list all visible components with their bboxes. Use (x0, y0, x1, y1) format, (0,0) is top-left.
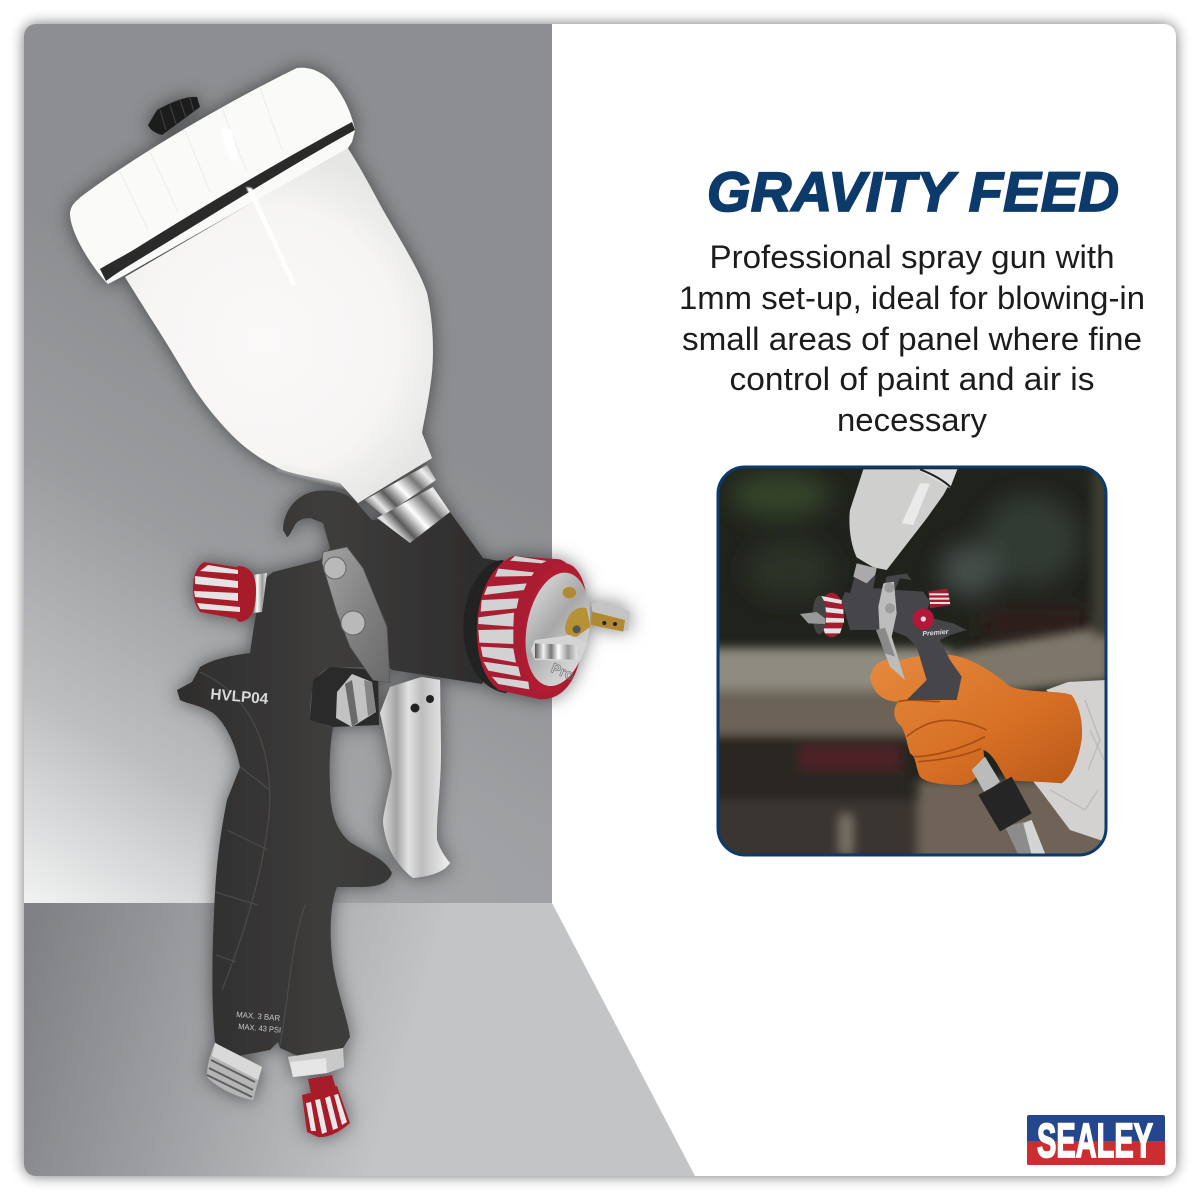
description text: small areas of panel where fine (682, 321, 1142, 357)
valve housing block (310, 667, 379, 727)
glove sleeve (1032, 680, 1106, 842)
trigger holes (410, 695, 434, 712)
description text: control of paint and air is (730, 361, 1094, 397)
miniature gun branding: Premier (922, 629, 950, 638)
chrome valve (336, 674, 376, 727)
lever rivets (324, 557, 365, 635)
soft cup shading (280, 466, 372, 490)
grip contour lines (200, 672, 305, 1045)
cup sealing band (100, 122, 355, 281)
pressure marking (236, 1010, 281, 1035)
ring flutes (478, 556, 547, 689)
sleeve creases (1050, 700, 1104, 810)
miniature cup details (902, 469, 957, 525)
miniature cup (849, 469, 957, 570)
grey wall backdrop (24, 24, 552, 904)
orange glove (870, 655, 1082, 785)
description text: 1mm set-up, ideal for blowing-in (679, 280, 1145, 316)
in-use photo (710, 467, 1118, 870)
fluid adjuster knob (288, 1048, 350, 1137)
head, nozzle ring and air cap: Pro (549, 660, 576, 683)
cup highlights (220, 128, 296, 285)
trigger (380, 677, 450, 878)
product: spray gun (70, 68, 630, 1137)
description text (679, 239, 1145, 438)
gun body and grip (177, 490, 510, 1057)
swing lever plate (322, 547, 390, 683)
paint cup lid knob (148, 97, 200, 135)
model marking HVLP04: HVLP04 (210, 686, 269, 708)
pressure marking: MAX. 3 BAR (236, 1010, 281, 1023)
grey floor backdrop (24, 903, 695, 1176)
heading: GRAVITY FEED (707, 160, 1119, 223)
cup lid (70, 68, 355, 284)
gravity paint cup (125, 147, 433, 503)
knurled rear knob (193, 562, 267, 622)
lid ribs (120, 88, 282, 230)
blurred workshop background (710, 467, 1118, 870)
hose and coupling (972, 757, 1045, 855)
head, nozzle ring and air cap (463, 556, 630, 699)
pressure marking: MAX. 43 PSI (238, 1022, 281, 1035)
glove finger creases (898, 700, 987, 762)
description text: Professional spray gun with (710, 239, 1114, 275)
threaded air inlet (207, 1043, 262, 1100)
miniature spray gun (800, 563, 967, 700)
chrome collars (365, 465, 450, 543)
description text: necessary (837, 402, 987, 438)
